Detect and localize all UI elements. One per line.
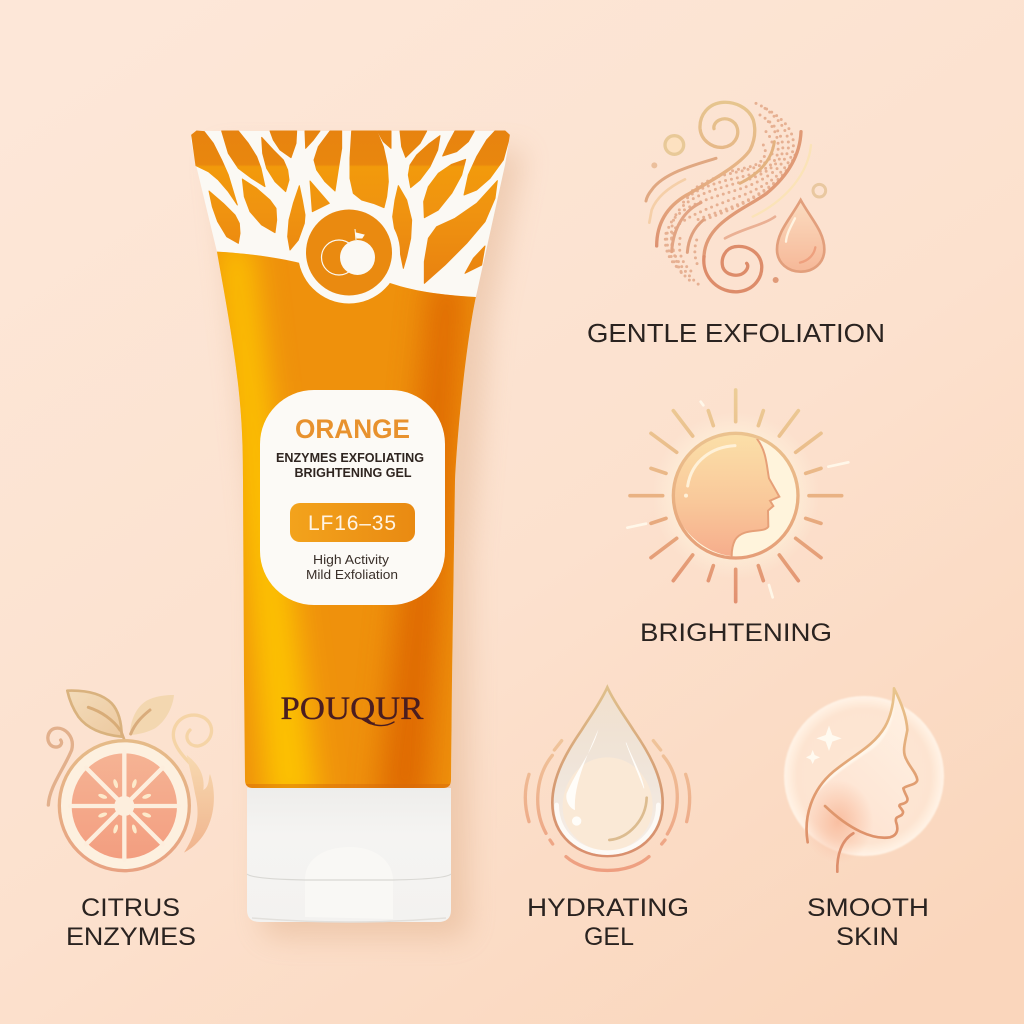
exfoliating dots [665,103,795,284]
label: citrus enzymes: ENZYMES [66,923,196,951]
left tendril swirl [48,728,72,805]
water drop body [552,687,663,856]
citrus rim and pith [59,741,189,871]
face silhouette [673,433,779,556]
top spiral with flowing tail [657,102,755,246]
brand name: POUQUR [280,691,424,727]
circle disc [673,433,798,558]
label benefit lines: High Activity [313,553,390,567]
label subtitle: BRIGHTENING GEL [294,466,412,480]
inner gel pool [563,757,653,851]
tube orange body [216,252,476,788]
label: gentle exfoliation: GENTLE EXFOLIATION [587,318,885,348]
sparkles [627,402,848,597]
label benefit lines: Mild Exfoliation [306,568,398,582]
leaves [67,691,122,737]
gloss highlight [688,446,735,486]
tube shadow [215,150,525,938]
citrus seeds [98,779,152,834]
sparkles [816,726,842,751]
icon: brightening sun with face [627,390,848,602]
flowing lines [646,158,716,201]
citrus segments [72,753,177,859]
label: brightening: BRIGHTENING [640,619,832,647]
gloss highlights [566,729,598,810]
head highlight [817,697,894,793]
label: smooth skin: SKIN [836,923,899,951]
product label [260,390,445,605]
tube top white panel [191,131,509,788]
face fill [807,688,917,872]
label title: ORANGE [295,414,410,444]
neck line [837,833,853,872]
label code pill [290,503,415,542]
ripple arcs [525,741,690,870]
label code pill: LF16–35 [308,512,396,535]
branch and leaf pattern, right half [350,131,509,283]
small rings and dots [665,136,684,154]
icon: gentle exfoliation swirl and droplet [646,102,826,292]
neck blush [803,780,873,863]
product tube [191,131,525,938]
icon: smooth skin face profile [784,688,944,872]
sun rays [630,390,842,602]
label: hydrating gel: GEL [584,923,634,951]
bottom spiral [704,246,762,292]
orange fruit badge [298,202,400,304]
small droplet [777,200,824,272]
label: hydrating gel: HYDRATING [527,894,689,922]
label: smooth skin: SMOOTH [807,894,929,922]
icon: citrus slice with leaves [48,691,214,871]
branch and leaf pattern, left half [192,131,342,250]
label subtitle: ENZYMES EXFOLIATING [276,451,424,465]
glow disc [784,696,944,856]
right flame swirl [173,715,212,763]
face contour [807,688,917,842]
icon: hydrating gel droplet [525,687,690,870]
label: citrus enzymes: CITRUS [81,894,180,922]
tube cap [247,788,451,922]
